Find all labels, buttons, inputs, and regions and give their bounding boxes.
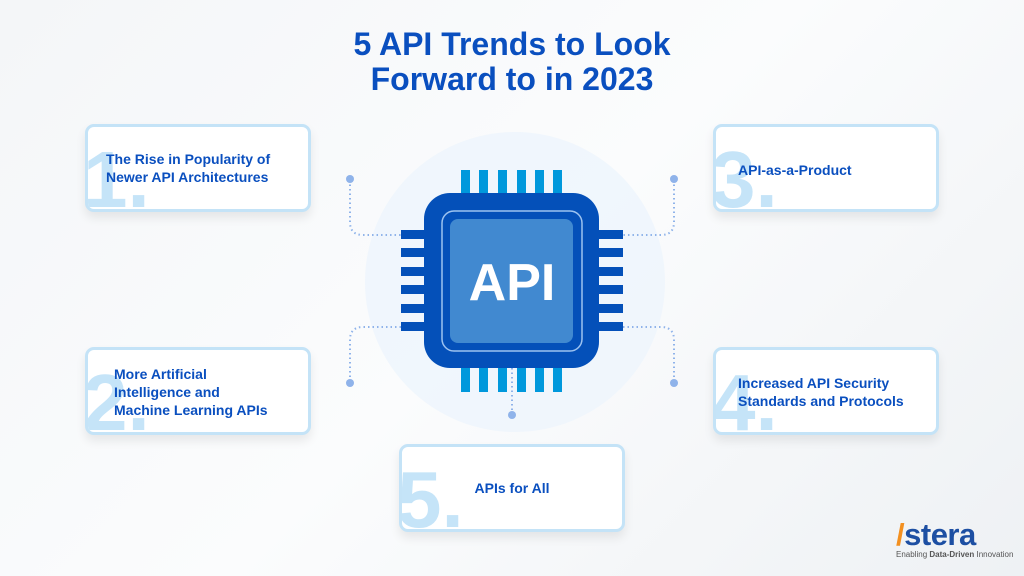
- box 2: Machine Learning APIs: [114, 402, 268, 418]
- box 4: Standards and Protocols: [738, 393, 904, 409]
- box 3: [713, 124, 939, 212]
- box 2: More Artificial: [114, 366, 207, 382]
- box 4: Increased API Security: [738, 375, 889, 391]
- chip diagram: API: [469, 254, 555, 312]
- box 1: [85, 124, 311, 212]
- box 3: API-as-a-Product: [738, 162, 852, 178]
- box 5: APIs for All: [475, 480, 549, 496]
- box 4: [713, 347, 939, 435]
- box 1: The Rise in Popularity of: [106, 151, 270, 167]
- box 2: Intelligence and: [114, 384, 220, 400]
- title: Forward to in 2023: [371, 61, 653, 97]
- logo: Enabling Data-Driven Innovation: [896, 550, 1013, 559]
- box 2: [85, 347, 311, 435]
- box 1: Newer API Architectures: [106, 169, 268, 185]
- title: [353, 26, 671, 97]
- title: 5 API Trends to Look: [353, 26, 671, 62]
- logo: [896, 517, 1013, 559]
- logo: /stera: [896, 517, 976, 552]
- box 5: [399, 444, 625, 532]
